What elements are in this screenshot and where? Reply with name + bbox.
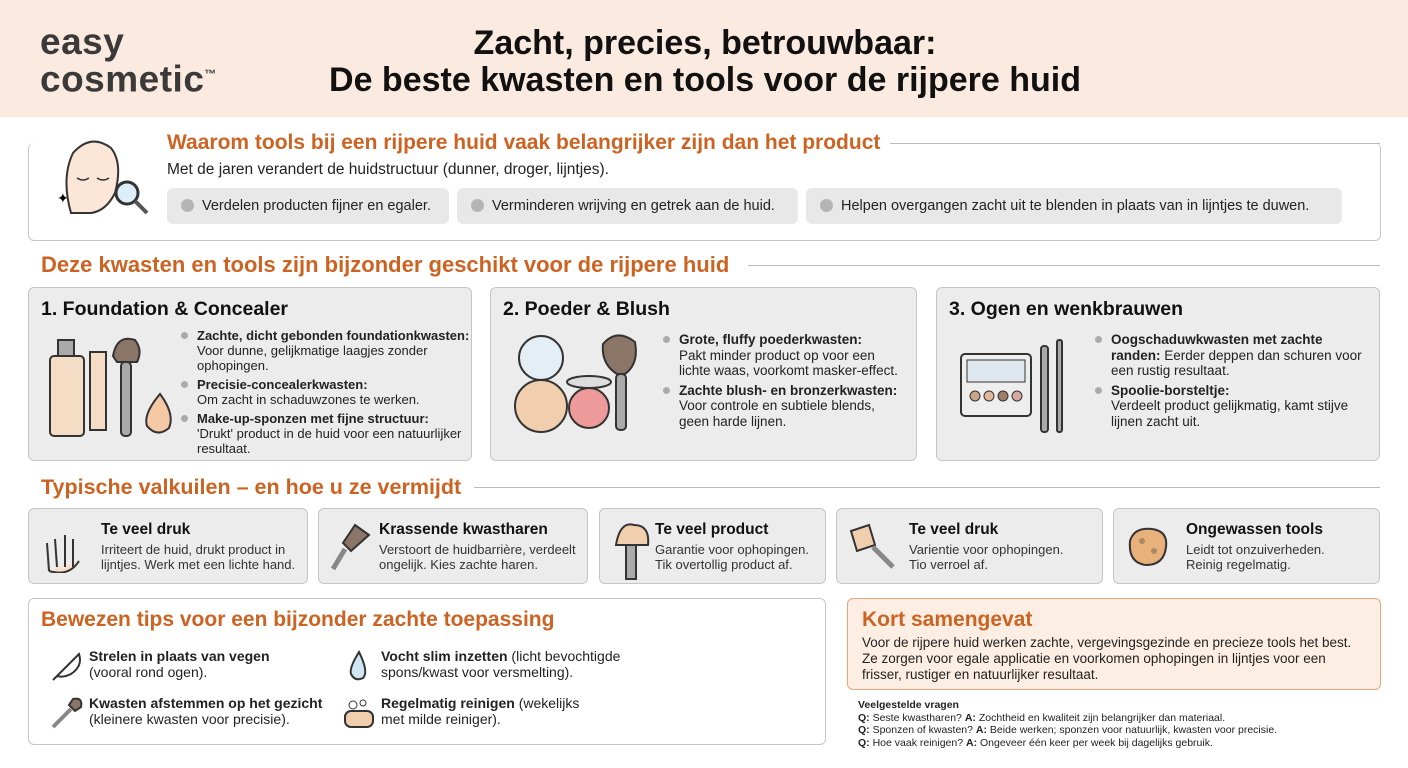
pitfall 3: Garantie voor ophopingen.	[655, 542, 809, 557]
pill 3: Helpen overgangen zacht uit te blenden in plaats van in lijntjes te duwen.	[841, 198, 1309, 214]
logo	[40, 21, 217, 99]
pitfall 3: Tik overtollig product af.	[655, 557, 793, 572]
heading: why: Waarom tools bij een rijpere huid vaak belangrijker zijn dan het product	[167, 131, 880, 154]
pitfall 4	[836, 508, 1103, 584]
pitfall 5	[1113, 508, 1380, 584]
pitfall 5: Reinig regelmatig.	[1186, 557, 1291, 572]
logo: easy	[40, 21, 124, 62]
icon: foundation tools	[49, 338, 172, 437]
tip 1	[52, 648, 270, 681]
bullets: Verdeelt product gelijkmatig, kamt stijve lijnen zacht uit.	[1111, 398, 1348, 428]
pitfall 2: Verstoort de huidbarrière, verdeelt	[379, 542, 576, 557]
icon: face with magnifier	[57, 140, 148, 214]
pitfall 4: Tio verroel af.	[909, 557, 988, 572]
bullets	[1095, 332, 1362, 429]
panel: foundation	[28, 287, 472, 461]
panel: eyes: 3. Ogen en wenkbrauwen	[949, 298, 1183, 320]
pitfall 5: Leidt tot onzuiverheden.	[1186, 542, 1325, 557]
FAQ: Q: Hoe vaak reinigen? A: Ongeveer één keer per week bij dagelijks gebruik.	[858, 736, 1213, 748]
bullets: Om zacht in schaduwzones te werken.	[197, 392, 420, 407]
header band	[0, 0, 1408, 117]
title: De beste kwasten en tools voor de rijpere huid	[329, 61, 1081, 99]
title: Zacht, precies, betrouwbaar:	[474, 24, 936, 62]
pitfall 1: Irriteert de huid, drukt product in	[101, 542, 285, 557]
pitfall 5: Ongewassen tools	[1186, 521, 1323, 538]
FAQ: Q: Seste kwastharen? A: Zochtheid en kwaliteit zijn belangrijker dan materiaal.	[858, 712, 1225, 724]
bullets: Spoolie-borsteltje:	[1111, 382, 1230, 398]
tip 1: Strelen in plaats van vegen	[89, 648, 270, 664]
tip 1: (vooral rond ogen).	[89, 664, 207, 680]
pitfall 3: Te veel product	[655, 521, 768, 538]
FAQ	[858, 699, 1277, 748]
pill 1	[167, 188, 449, 224]
bullets	[663, 332, 898, 429]
pill 2	[457, 188, 798, 224]
bullets: Voor dunne, gelijkmatige laagjes zonder ophopingen.	[197, 343, 428, 373]
tip 3	[52, 695, 322, 728]
section heading: tools: Deze kwasten en tools zijn bijzonder geschikt voor de rijpere huid	[41, 252, 729, 277]
tip 4: Regelmatig reinigen (wekelijks	[381, 695, 579, 711]
pitfall 1: lijntjes. Werk met een lichte hand.	[101, 557, 295, 572]
pitfall 2: ongelijk. Kies zachte haren.	[379, 557, 538, 572]
panel: summary	[847, 598, 1381, 690]
panel: foundation: 1. Foundation & Concealer	[41, 298, 288, 320]
pitfall 4: Te veel druk	[909, 521, 998, 538]
tip 4: met milde reiniger).	[381, 711, 501, 727]
FAQ: Q: Sponzen of kwasten? A: Beide werken; sponzen voor natuurlijk, kwasten voor precisie.	[858, 724, 1277, 736]
panel: powder: 2. Poeder & Blush	[503, 298, 670, 320]
bullets: 'Drukt' product in de huid voor een natuurlijker resultaat.	[197, 426, 461, 456]
tip 2: spons/kwast voor versmelting).	[381, 664, 573, 680]
heading: summary: Kort samengevat	[862, 608, 1032, 631]
bullets: Grote, fluffy poederkwasten:	[679, 332, 862, 347]
pitfall 3	[599, 508, 826, 584]
tip 2: Vocht slim inzetten (licht bevochtigde	[381, 648, 620, 664]
bullets	[181, 328, 469, 456]
panel: eyes	[936, 287, 1380, 461]
bullets: Make-up-sponzen met fijne structuur:	[197, 411, 429, 426]
bullets: Oogschaduwkwasten met zachte randen: Eerder deppen dan schuren voor een rustig resultaat.	[1111, 332, 1362, 378]
heading: tips: Bewezen tips voor een bijzonder zachte toepassing	[41, 608, 554, 631]
icon: face with magnifier: ✦	[57, 190, 69, 206]
bullets: Zachte blush- en bronzerkwasten:	[679, 382, 897, 398]
icon: powder compacts	[514, 334, 637, 433]
FAQ: Veelgestelde vragen	[858, 699, 959, 711]
pill 2: Verminderen wrijving en getrek aan de huid.	[492, 198, 775, 214]
pitfall 2: Krassende kwastharen	[379, 521, 548, 538]
tip 4	[344, 695, 579, 728]
pill 3	[806, 188, 1342, 224]
pitfall 4: Varientie voor ophopingen.	[909, 542, 1063, 557]
tip 2	[350, 648, 620, 680]
tip 3: Kwasten afstemmen op het gezicht	[89, 695, 322, 711]
pill 1: Verdelen producten fijner en egaler.	[202, 198, 431, 214]
logo: cosmetic™	[40, 58, 217, 99]
title	[329, 24, 1081, 99]
pitfall 2	[318, 508, 588, 584]
pitfall 1: Te veel druk	[101, 521, 190, 538]
bullets: Zachte, dicht gebonden foundationkwasten:	[197, 328, 469, 343]
text: intro: Met de jaren verandert de huidstructuur (dunner, droger, lijntjes).	[167, 161, 609, 178]
section heading: pitfalls: Typische valkuilen – en hoe u ze vermijdt	[41, 475, 461, 499]
panel: why tools	[28, 143, 1381, 241]
pitfall 1	[28, 508, 308, 584]
tip 3: (kleinere kwasten voor precisie).	[89, 711, 290, 727]
panel: powder	[490, 287, 917, 461]
panel: tips	[28, 598, 826, 745]
icon: eyeshadow palette	[960, 339, 1063, 433]
text: summary: Voor de rijpere huid werken zachte, vergevingsgezinde en precieze tools het best. Ze zorgen voor egale applicatie en voorkomen ophopingen in lijntjes voor een frisser, rustiger en natuurlijker resultaat.	[862, 635, 1351, 682]
bullets: Pakt minder product op voor een lichte waas, voorkomt masker-effect.	[679, 348, 898, 378]
bullets: Voor controle en subtiele blends, geen harde lijnen.	[679, 398, 875, 428]
bullets: Precisie-concealerkwasten:	[197, 377, 368, 392]
